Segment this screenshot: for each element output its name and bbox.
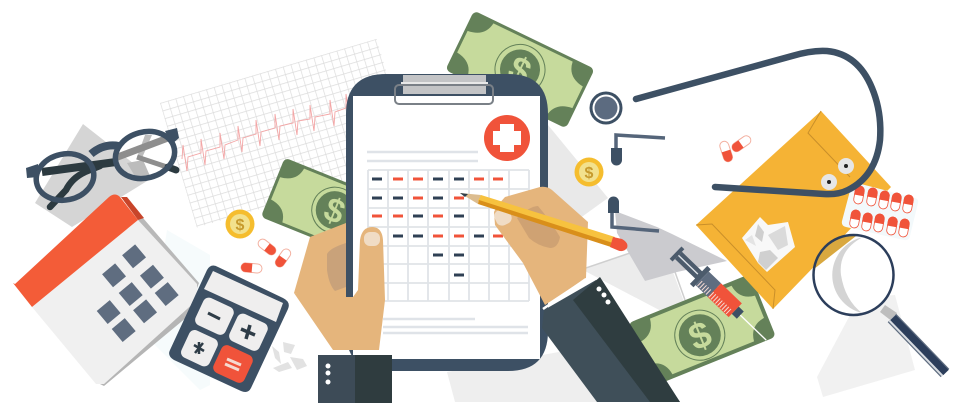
banknote left (261, 158, 407, 266)
table dashes dark (372, 179, 484, 275)
capsules right (719, 134, 753, 163)
header text lines (367, 152, 478, 161)
banknote top (445, 11, 595, 128)
table grid (368, 170, 529, 301)
calendar date squares (97, 244, 179, 342)
banknote left: $ (318, 190, 350, 232)
stethoscope ear tubes (608, 135, 665, 231)
clip (395, 75, 493, 104)
right hand (492, 187, 588, 305)
clipboard (346, 74, 548, 371)
envelope crumpled paper (742, 217, 795, 272)
banknote bottom (628, 274, 776, 386)
yellow envelope (696, 111, 891, 309)
blister pack (842, 183, 918, 240)
right sleeve (542, 277, 680, 402)
coin right: $ (585, 165, 594, 182)
magnifying glass (814, 235, 946, 373)
pencil (460, 193, 627, 251)
capsules left (241, 237, 292, 273)
scraps of paper (272, 342, 307, 372)
calculator (169, 266, 289, 392)
coin left (226, 210, 254, 238)
coin left: $ (236, 217, 245, 234)
left sleeve (318, 355, 392, 403)
calculator keys (179, 296, 270, 385)
glasses (26, 125, 180, 207)
background sheets of grey paper (150, 125, 915, 402)
footer text lines (383, 319, 528, 333)
envelope string buttons (821, 158, 854, 190)
stethoscope tube (636, 51, 880, 194)
paper sheet (353, 96, 540, 359)
blister pills (849, 185, 914, 238)
ECG graph paper (160, 39, 414, 228)
grey envelope (583, 211, 727, 318)
table dashes red (372, 179, 503, 236)
banknote bottom: $ (683, 313, 718, 359)
coin right (574, 158, 604, 186)
ECG trace (182, 94, 351, 171)
syringe (667, 244, 775, 349)
banknote top: $ (502, 47, 538, 93)
grey paper under glasses (35, 124, 152, 227)
stethoscope chest piece (590, 92, 622, 124)
left hand back (294, 223, 350, 300)
medical cross badge (484, 115, 530, 161)
calendar (13, 194, 199, 386)
left hand front with thumb (294, 227, 385, 350)
